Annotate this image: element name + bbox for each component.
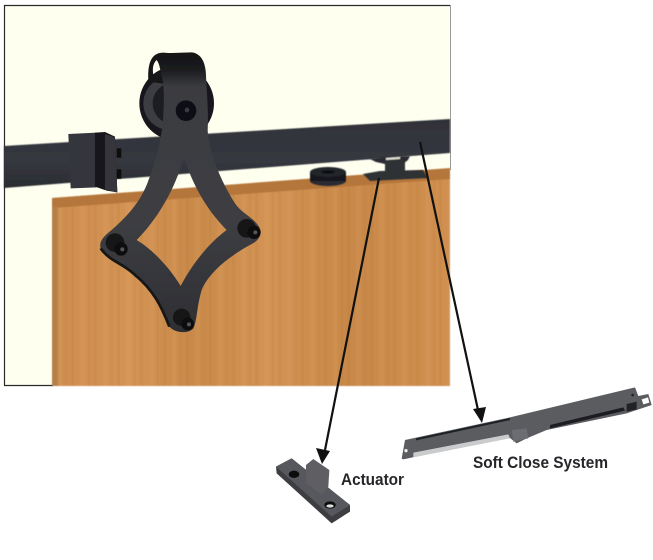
panel frame bbox=[4, 6, 450, 386]
mounting bolts bbox=[106, 219, 261, 330]
product: actuator bbox=[276, 458, 350, 523]
arrow: to actuator bbox=[316, 178, 379, 464]
sliding track rail bbox=[4, 119, 450, 188]
lower shadow edge bbox=[101, 248, 169, 327]
wall background bbox=[4, 5, 450, 385]
panel bottom edge bbox=[4, 384, 53, 386]
label: soft close system: Soft Close System bbox=[473, 453, 608, 472]
axle bolt bbox=[176, 100, 196, 121]
roller wheel bbox=[139, 66, 214, 141]
actuator mounted on door bbox=[363, 156, 428, 181]
connector bracket bbox=[68, 132, 121, 192]
product: soft close system bbox=[402, 387, 652, 459]
panel: door and track photo bbox=[4, 5, 450, 386]
barn door hanger bbox=[68, 52, 261, 332]
door stop bbox=[310, 167, 346, 186]
panel right edge bbox=[450, 5, 452, 170]
door bbox=[52, 168, 450, 386]
back strap bbox=[147, 53, 173, 87]
label: actuator: Actuator bbox=[341, 470, 404, 489]
hanger plate bbox=[100, 52, 260, 332]
arrow: to soft close system bbox=[420, 142, 486, 423]
